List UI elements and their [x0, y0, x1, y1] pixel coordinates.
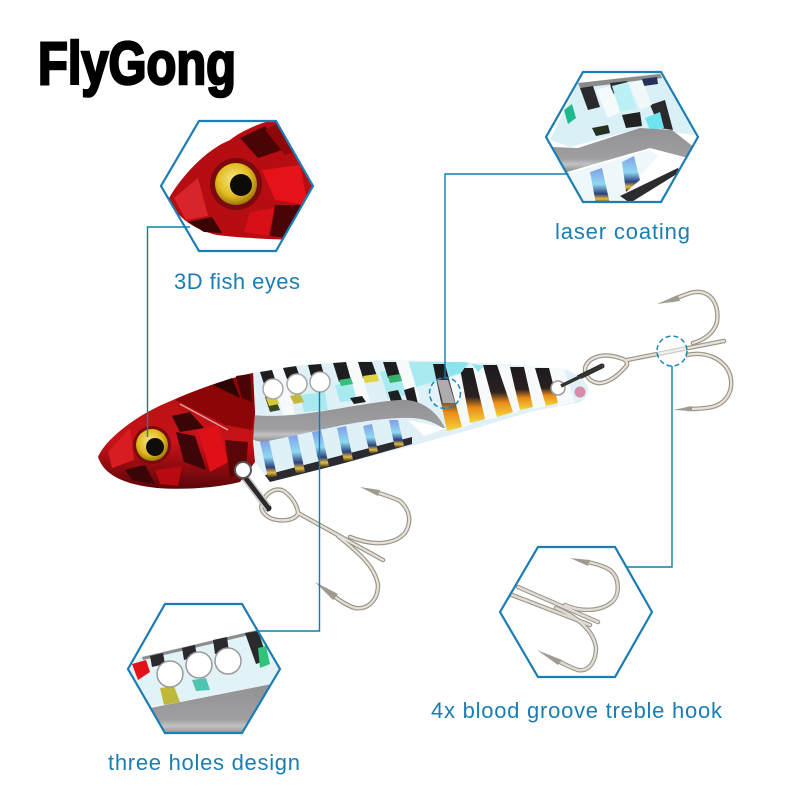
- lure: red head: [98, 373, 255, 489]
- lure: main fishing lure with hooks: [98, 292, 731, 608]
- holes hexagon image: [130, 630, 282, 735]
- label: three holes design: [108, 750, 300, 775]
- panel: laser coating: [546, 72, 698, 244]
- hook: bottom treble hook: [261, 487, 409, 608]
- foil: white gap: [408, 420, 446, 436]
- hook hexagon image: [512, 558, 618, 670]
- lure: three holes: [263, 372, 330, 399]
- marker: dashed circle on coating: [430, 378, 460, 408]
- eye hexagon image: [168, 120, 320, 240]
- foil: lower blue strips: [260, 420, 404, 478]
- callout: 3D fish eyes connector: [148, 227, 190, 437]
- head: upper dark facet: [175, 373, 255, 430]
- foil: pale cyan patches: [300, 362, 470, 412]
- label: 3D fish eyes: [174, 269, 300, 294]
- lure body foil: [253, 360, 588, 482]
- hook: ring left: [243, 476, 270, 510]
- lure: tail ring hole: [551, 381, 565, 395]
- holes hexagon outline: [128, 604, 280, 733]
- foil: grey spot in coating circle: [437, 380, 455, 403]
- foil: green and yellow tips: [265, 374, 402, 412]
- foil: cyan accents: [445, 362, 484, 376]
- head: 3D eye: [136, 429, 168, 461]
- laser hexagon image: [550, 73, 695, 204]
- lure: tail rainbow spot: [574, 386, 586, 398]
- head: line ring hole: [235, 462, 251, 478]
- title: FlyGong brand: FlyGong: [38, 30, 236, 97]
- panel: 3D fish eyes: [161, 120, 320, 294]
- marker: dashed circle on hook: [657, 336, 687, 366]
- panel: treble hook: [431, 547, 723, 723]
- callout: laser coating connector: [445, 174, 570, 377]
- hook: ring right: [561, 366, 602, 386]
- head: dark eye socket: [133, 426, 171, 464]
- hook: right treble hook: [585, 292, 731, 411]
- foil: lower dark edge: [262, 437, 412, 484]
- laser hexagon outline: [546, 72, 698, 202]
- label: laser coating: [555, 219, 690, 244]
- foil: dark strips upper left: [260, 362, 418, 404]
- callout: treble hook connector: [627, 366, 672, 567]
- callout: three holes connector: [258, 392, 320, 631]
- eye hexagon outline: [161, 121, 313, 251]
- lure: ring over tail hole: [561, 366, 602, 386]
- label: 4x blood groove treble hook: [431, 698, 723, 723]
- lure: grey cutout band: [253, 400, 445, 442]
- hook hexagon outline: [500, 547, 652, 677]
- panel: three holes design: [108, 604, 300, 775]
- foil: white strips: [272, 360, 575, 428]
- foil: orange dark strips right: [433, 364, 558, 431]
- head: facets: [172, 412, 204, 432]
